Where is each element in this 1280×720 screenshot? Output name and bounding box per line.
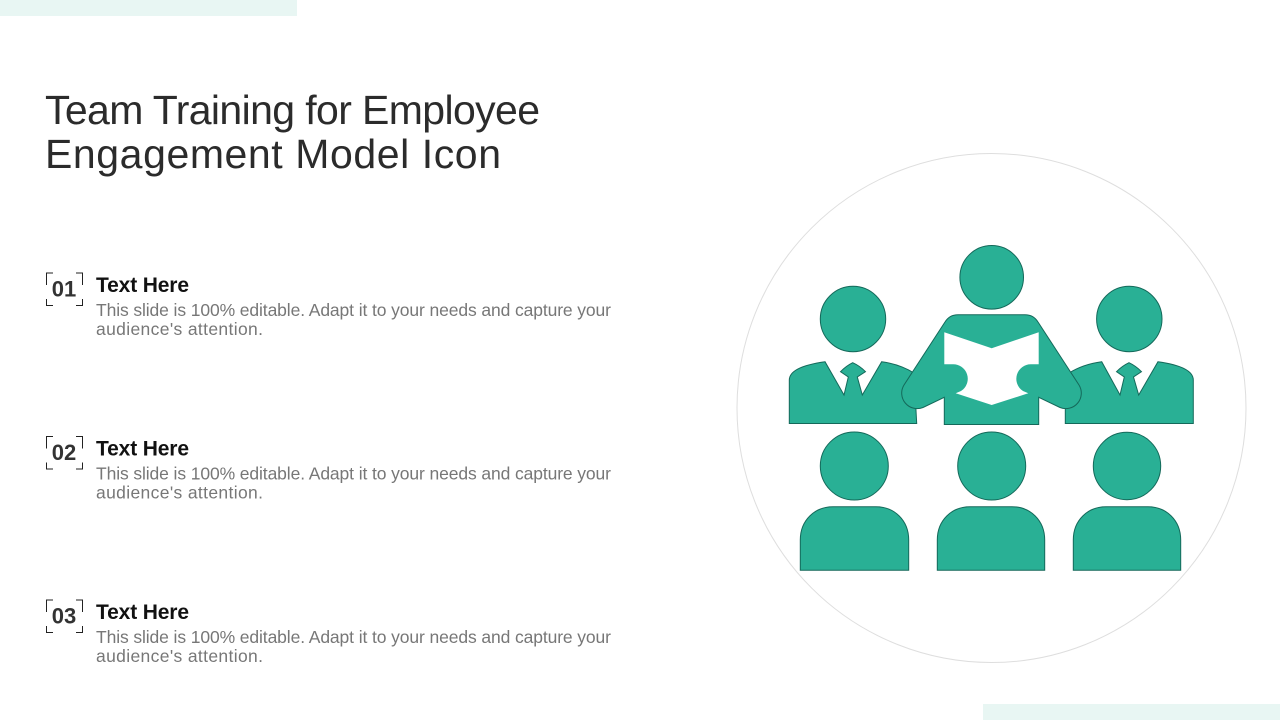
description 01 (96, 300, 611, 339)
description 01: This slide is 100% editable. Adapt it to your needs and capture your (96, 300, 611, 320)
description 01: audience's attention. (96, 319, 263, 339)
number badge 03 (46, 600, 82, 632)
heading 01: Text Here (96, 274, 189, 297)
left suited man (789, 286, 917, 424)
title (45, 87, 540, 177)
top accent bar (0, 0, 297, 16)
lower left attendee (800, 432, 909, 570)
description 03: This slide is 100% editable. Adapt it to your needs and capture your (96, 627, 611, 647)
heading 03: Text Here (96, 601, 189, 624)
title: Engagement Model Icon (45, 131, 501, 177)
description 02 (96, 464, 611, 502)
number badge 01: 01 (52, 276, 76, 302)
bottom accent bar (983, 704, 1280, 720)
description 03 (96, 627, 611, 666)
item 02 (46, 436, 611, 502)
right suited man (1065, 286, 1193, 424)
title: Team Training for Employee (45, 87, 540, 133)
number badge 01 (46, 273, 82, 306)
description 03: audience's attention. (96, 646, 263, 666)
team training icon (789, 245, 1193, 570)
lower middle attendee (937, 432, 1045, 570)
description 02: audience's attention. (96, 482, 263, 502)
number badge 02: 02 (52, 440, 76, 465)
number badge 03: 03 (52, 604, 76, 628)
item 01 (46, 273, 611, 339)
number badge 02 (46, 436, 82, 469)
icon circle outline (737, 154, 1246, 662)
description 02: This slide is 100% editable. Adapt it to your needs and capture your (96, 464, 611, 484)
presenter with open book (902, 245, 1081, 424)
lower right attendee (1073, 432, 1181, 570)
item 03 (46, 600, 611, 666)
heading 02: Text Here (96, 438, 189, 460)
